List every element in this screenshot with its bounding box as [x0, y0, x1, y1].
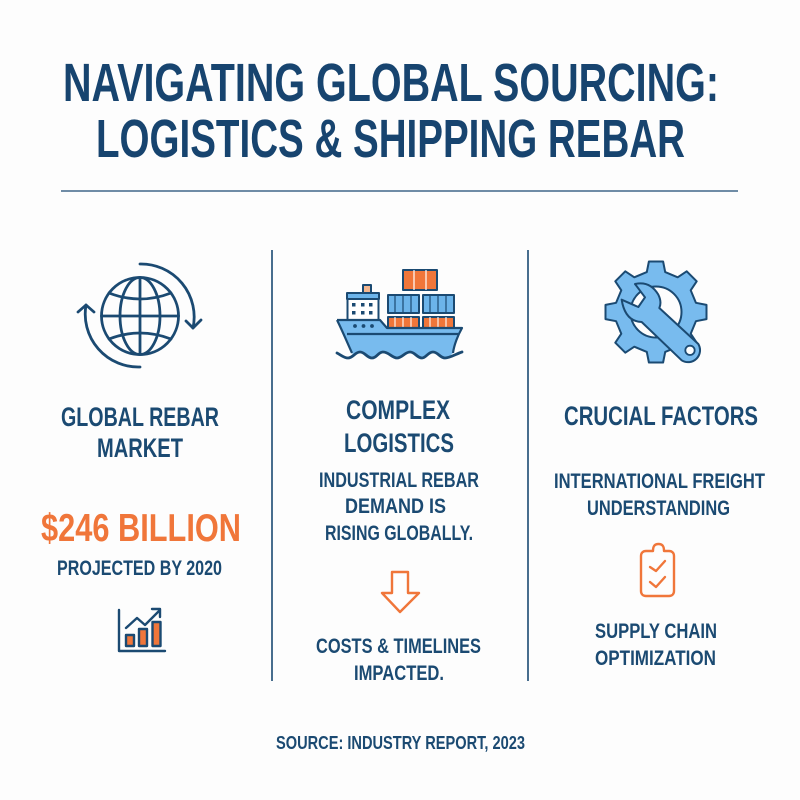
icon: checklist clipboard	[641, 544, 674, 596]
icon: container ship	[337, 270, 462, 358]
icon: globe with circular arrows	[78, 264, 201, 367]
icon: gear and wrench	[606, 262, 706, 362]
text: supply chain optimization: OPTIMIZATION	[595, 647, 716, 670]
text: rising demand	[319, 469, 479, 545]
heading: complex logistics: COMPLEX	[346, 395, 450, 425]
text: supply chain optimization: SUPPLY CHAIN	[595, 620, 717, 643]
heading: complex logistics: LOGISTICS	[344, 428, 454, 458]
panel: complex logistics	[316, 270, 481, 685]
text: rising demand: RISING GLOBALLY.	[325, 522, 473, 545]
title	[63, 54, 719, 169]
text: rising demand: DEMAND IS	[345, 495, 446, 518]
icon: down arrow	[382, 572, 419, 612]
heading: global rebar market: MARKET	[97, 433, 183, 463]
icon: growth bar chart	[119, 609, 165, 651]
text: costs and timelines	[316, 635, 481, 685]
stat caption: PROJECTED BY 2020	[57, 557, 222, 580]
text: costs and timelines: IMPACTED.	[354, 662, 444, 685]
text: supply chain optimization	[595, 620, 717, 670]
text: rising demand: INDUSTRIAL REBAR	[319, 469, 479, 492]
heading: global rebar market: GLOBAL REBAR	[61, 402, 219, 432]
panel: crucial factors	[554, 262, 765, 670]
panel: global rebar market	[41, 264, 241, 651]
text: international freight	[554, 470, 765, 520]
stat: market value: $246 BILLION	[41, 507, 241, 550]
text: costs and timelines: COSTS & TIMELINES	[316, 635, 481, 658]
text: international freight: UNDERSTANDING	[587, 497, 730, 520]
heading: global rebar market	[61, 402, 219, 463]
heading: complex logistics	[344, 395, 454, 458]
source note: SOURCE: INDUSTRY REPORT, 2023	[276, 733, 525, 753]
